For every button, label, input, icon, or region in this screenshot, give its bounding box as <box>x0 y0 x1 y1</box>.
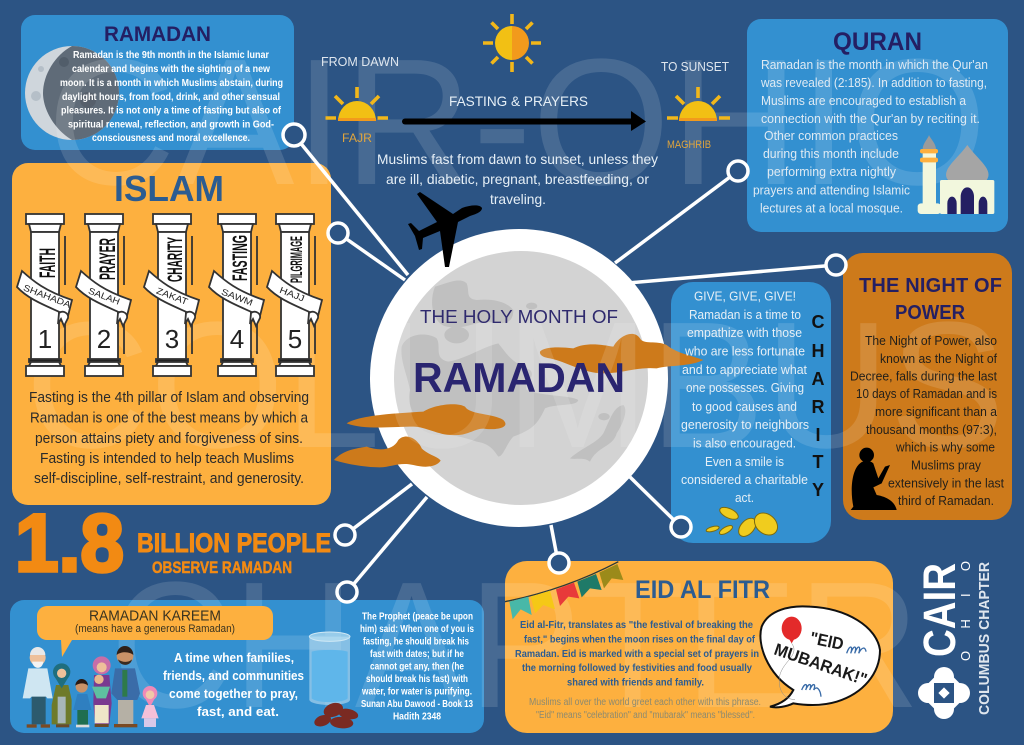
panel: ramadan background <box>21 15 294 150</box>
label: vertical charity <box>812 312 824 500</box>
body: charity: empathize with those <box>687 325 802 340</box>
body: hadith: Sunan Abu Dawood - Book 13 <box>361 699 473 710</box>
mother with baby <box>92 656 112 727</box>
body: fasting pillar: Fasting is intended to help teach Muslims <box>40 451 294 467</box>
body: hadith: fast with dates; but if he <box>370 649 464 660</box>
callout: eid mubarak speech bubble: "EID <box>808 628 845 654</box>
body: families: fast, and eat. <box>197 705 279 719</box>
label: fajr: FAJR <box>342 131 372 145</box>
body: charity: one possesses. Giving <box>686 380 804 395</box>
note: eid greeting: Muslims all over the world greet each other with this phrase. <box>529 697 761 708</box>
label: vertical charity: R <box>812 397 824 417</box>
body: hadith <box>360 612 474 722</box>
icon: airplane <box>408 192 482 267</box>
statistic: 1.8 billion people: BILLION PEOPLE <box>137 528 331 558</box>
pillar 4 fasting: SAWM <box>220 287 254 308</box>
body: hadith: cannot get any, then (he <box>370 662 464 672</box>
pillar 3 charity <box>144 214 199 376</box>
label: vertical charity: I <box>815 425 821 445</box>
panel: eid al fitr background <box>505 561 893 733</box>
label: vertical charity: C <box>812 312 824 332</box>
body: night of power: Muslims pray <box>911 458 981 472</box>
body: night of power: 10 days of Ramadan and is <box>856 386 997 401</box>
icon: sun <box>483 14 541 72</box>
heading: the night of power: POWER <box>895 302 966 324</box>
label: vertical charity: H <box>812 341 824 361</box>
body: charity <box>681 288 809 505</box>
pillar 3 charity: CHARITY <box>164 237 187 282</box>
icon: bunting <box>505 562 623 619</box>
body: hadith: should break his fast) with <box>366 674 468 685</box>
logo: cair ohio columbus chapter: CAIR <box>914 563 965 657</box>
heading: ramadan: RAMADAN <box>104 23 211 46</box>
body: fasting pillar: Fasting is the 4th pillar of Islam and observing <box>29 390 309 406</box>
body: night of power: which is why some <box>895 440 995 454</box>
body: ramadan definition: pleasures. It is not only a time of fasting but also of <box>61 106 282 116</box>
family panel content <box>23 606 474 729</box>
islam content <box>17 168 322 487</box>
pillar 2 prayer: PRAYER <box>95 238 120 280</box>
body: fasting exemptions: traveling. <box>490 191 546 207</box>
central moon <box>370 229 668 527</box>
label: to sunset: TO SUNSET <box>661 59 729 74</box>
body: charity: to good causes and <box>692 399 797 414</box>
statistic: 1.8 billion people: OBSERVE RAMADAN <box>152 559 292 577</box>
body: night of power: The Night of Power, also <box>865 333 997 348</box>
body: ramadan definition: moon. It is a month in which Muslims abstain, during <box>60 78 283 89</box>
pillar 1 faith <box>17 214 72 376</box>
body: night of power <box>850 333 1004 508</box>
pillar 2 prayer: 2 <box>97 324 111 354</box>
body: quran: lectures at a local mosque. <box>760 202 903 216</box>
callout: ramadan kareem: RAMADAN KAREEM <box>89 609 221 625</box>
body: eid al fitr <box>515 619 759 688</box>
icon: water glass and dates <box>309 632 359 729</box>
body: hadith: The Prophet (peace be upon <box>362 612 473 622</box>
body: ramadan definition: spiritual renewal, reflection, and growth in God- <box>68 120 274 130</box>
panel: islam background <box>12 163 331 505</box>
heading: the night of power <box>859 275 1002 324</box>
pillar 3 charity: ZAKAT <box>155 286 190 307</box>
panel: charity background <box>671 282 831 543</box>
body: hadith: Hadith 2348 <box>393 712 441 722</box>
label: from dawn: FROM DAWN <box>321 54 399 69</box>
callout: eid mubarak speech bubble <box>760 606 880 707</box>
pillar 5 pilgrimage: PILGRIMAGE <box>287 236 306 283</box>
body: hadith: him) said: When one of you is <box>360 624 474 635</box>
body: ramadan definition: consciousness and moral excellence. <box>92 133 250 144</box>
moon title: THE HOLY MONTH OF <box>420 307 618 327</box>
pillar 4 fasting: FASTING <box>229 235 252 281</box>
label: vertical charity: Y <box>812 480 824 500</box>
heading: eid al fitr: EID AL FITR <box>635 576 770 604</box>
body: fasting pillar: self-discipline, self-restraint, and generosity. <box>34 471 304 487</box>
body: eid al fitr: fast," begins when the moon rises on the final day of <box>524 634 755 646</box>
body: fasting pillar: Ramadan is one of the best means by which a <box>30 410 309 426</box>
icon: gold coins <box>706 505 782 540</box>
heading: quran: QURAN <box>833 28 922 56</box>
body: night of power: thousand months (97:3), <box>866 422 997 437</box>
watermark: COLUMBUS <box>25 285 1005 486</box>
body: charity: Ramadan is a time to <box>689 307 801 322</box>
heading: islam: ISLAM <box>114 168 224 209</box>
body: night of power: Decree, falls during the last <box>850 368 997 384</box>
body: quran: Other common practices <box>764 129 898 143</box>
body: night of power: known as the Night of <box>880 351 997 366</box>
panel: quran background <box>747 19 1008 232</box>
body: hadith: water, for water is purifying. <box>361 686 472 698</box>
statistic: 1.8 billion people: 1.8 <box>15 498 124 589</box>
body: families <box>163 651 304 719</box>
eid panel content <box>505 562 880 721</box>
label: vertical charity: A <box>812 369 824 389</box>
body: quran: Ramadan is the month in which the Qur'an <box>761 58 988 72</box>
body: eid al fitr: the morning followed by festivities and food usually <box>522 662 752 674</box>
ramadan text block <box>60 23 283 144</box>
body: fasting pillar: person attains piety and forgiveness of sins. <box>35 431 303 447</box>
pillar 1 faith: FAITH <box>35 248 60 278</box>
logo: cair ohio columbus chapter: COLUMBUS CHAPTER <box>976 562 993 715</box>
body: charity: GIVE, GIVE, GIVE! <box>694 288 796 304</box>
label: fasting and prayers: FASTING & PRAYERS <box>449 93 588 109</box>
note: eid greeting: "Eid" means "celebration" and "mubarak" means "blessed". <box>536 710 755 721</box>
body: hadith: fasting, he should break his <box>363 636 469 648</box>
connector lines and rings <box>283 124 846 602</box>
moon title: RAMADAN <box>413 354 625 401</box>
label: maghrib: MAGHRIB <box>667 139 711 151</box>
body: quran: prayers and attending Islamic <box>753 184 910 198</box>
body: quran: during this month include <box>763 147 899 161</box>
body: charity: act. <box>735 490 754 505</box>
boy <box>73 679 91 727</box>
pillar 5 pilgrimage: HAJJ <box>278 285 306 304</box>
pillar 5 pilgrimage <box>267 214 322 376</box>
charity text block <box>681 288 824 540</box>
body: families: A time when families, <box>174 651 294 665</box>
panel: night of power background <box>843 253 1012 520</box>
girl <box>141 686 159 727</box>
body: ramadan definition: calendar and begins with the sighting of a new <box>72 64 270 75</box>
pillar 3 charity: 3 <box>165 324 179 354</box>
panel: family and hadith background <box>10 600 484 733</box>
body: eid al fitr: shared with friends and family. <box>567 676 704 688</box>
pillar 2 prayer: SALAH <box>87 286 121 307</box>
body: ramadan definition <box>60 50 283 144</box>
callout: ramadan kareem <box>37 606 273 657</box>
quran text block <box>753 28 988 216</box>
arrow: dawn to sunset <box>405 111 646 131</box>
body: charity: who are less fortunate <box>684 344 805 358</box>
body: charity: and to appreciate what <box>682 362 807 377</box>
body: quran: connection with the Qur'an by reciting it. <box>761 112 980 126</box>
body: charity: generosity to neighbors <box>681 417 809 432</box>
icon: family <box>23 646 159 728</box>
body: families: come together to pray, <box>169 687 298 701</box>
icon: praying silhouette <box>851 448 897 510</box>
logo: cair ohio columbus chapter: OHIO <box>958 561 973 661</box>
logo: cair ohio columbus chapter <box>914 561 993 719</box>
clouds <box>334 334 703 467</box>
body: night of power: extensively in the last <box>888 476 1004 490</box>
body: quran: was revealed (2:185). In addition to fasting, <box>760 76 987 90</box>
body: eid al fitr: Ramadan. Eid is marked with a special set of prayers in <box>515 648 759 660</box>
icon: logo flower <box>918 667 970 719</box>
body: charity: Even a smile is <box>705 454 784 469</box>
body: quran: performing extra nightly <box>767 165 897 179</box>
icon: fajr half sun <box>326 87 388 121</box>
father <box>111 646 140 727</box>
pillar 5 pilgrimage: 5 <box>288 324 302 354</box>
body: fasting pillar <box>29 390 309 487</box>
pillar 4 fasting: 4 <box>230 324 244 354</box>
icon: crescent moon <box>25 46 119 140</box>
body: quran: Muslims are encouraged to establish a <box>761 94 966 108</box>
callout: ramadan kareem: (means have a generous Ramadan) <box>75 623 235 635</box>
grandmother <box>52 663 72 727</box>
body: night of power: third of Ramadan. <box>898 493 994 508</box>
body: families: friends, and communities <box>163 669 304 683</box>
label: vertical charity: T <box>812 452 824 472</box>
body: night of power: more significant than a <box>875 404 998 419</box>
icon: mosque <box>918 135 994 214</box>
watermark: CHAPTER <box>110 545 920 745</box>
body: ramadan definition: Ramadan is the 9th month in the Islamic lunar <box>73 50 269 61</box>
statistic: 1.8 billion people <box>15 498 331 589</box>
note: eid greeting <box>529 697 761 721</box>
body: fasting exemptions: are ill, diabetic, pregnant, breastfeeding, or <box>386 171 649 187</box>
night of power text block <box>850 275 1004 510</box>
heading: the night of power: THE NIGHT OF <box>859 275 1002 297</box>
callout: eid mubarak speech bubble: MUBARAK!" <box>772 640 870 689</box>
body: charity: considered a charitable <box>681 472 808 487</box>
body: charity: is also encouraged. <box>693 436 796 450</box>
body: ramadan definition: daylight hours, from food, drink, and other sensual <box>62 92 280 103</box>
pillar 1 faith: SHAHADA <box>22 283 72 310</box>
pillar 1 faith: 1 <box>38 324 52 354</box>
moon title <box>413 307 625 401</box>
grandfather <box>23 647 53 728</box>
body: quran <box>753 58 988 216</box>
pillar 2 prayer <box>76 214 131 376</box>
body: fasting exemptions <box>377 151 658 207</box>
body: eid al fitr: Eid al-Fitr, translates as "the festival of breaking the <box>520 619 753 631</box>
watermark: CAIR-OHIO <box>47 22 987 223</box>
body: fasting exemptions: Muslims fast from dawn to sunset, unless they <box>377 151 658 167</box>
icon: maghrib half sun <box>667 87 730 121</box>
pillar 4 fasting <box>209 214 264 376</box>
